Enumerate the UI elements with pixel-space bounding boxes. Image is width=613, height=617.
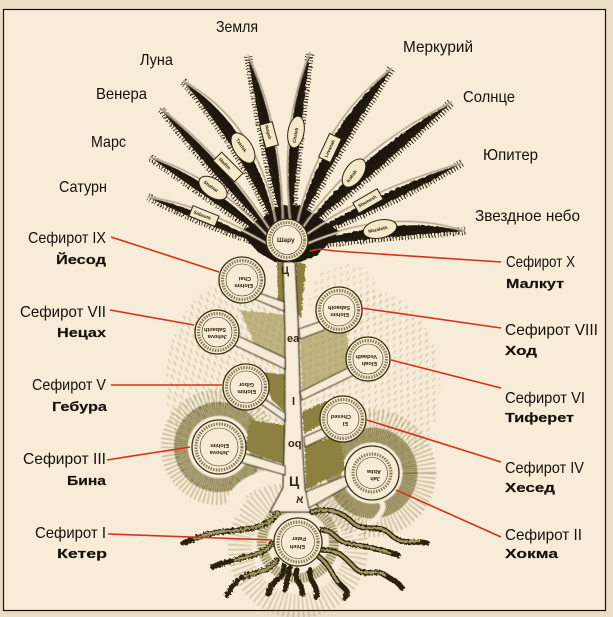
sefirot labels, left column: Бина [67, 473, 107, 488]
sefirot labels, left column: Йесод [56, 252, 107, 267]
sefirot labels, right column: Сефирот VI [505, 390, 585, 407]
engraved tree illustration [148, 52, 465, 606]
feather name tags: Madim [218, 157, 232, 171]
sefirah IX medallion [219, 257, 265, 303]
sefirah VIII medallion: Sabaoth [327, 304, 350, 310]
trunk letters: ea [287, 333, 300, 345]
sefirot labels, right column: Сефирот X [506, 254, 575, 271]
sefirot labels, left column: Гебура [52, 399, 108, 414]
planet labels: Солнце [463, 89, 515, 106]
planet labels: Сатурн [59, 179, 107, 196]
planet labels [59, 19, 580, 225]
sefirot labels, right column [505, 254, 598, 561]
sefirah II medallion: Abba [366, 468, 381, 474]
feathers dark barbs [148, 52, 465, 262]
sefirah II medallion [345, 446, 399, 500]
sefirah VII medallion: Jehova [207, 333, 227, 339]
trunk letters: Ц [281, 265, 289, 277]
pale arc around the root [232, 476, 283, 515]
sefirah III medallion: Elohim [210, 442, 229, 448]
sefirah X medallion [266, 219, 308, 261]
sefirah II medallion: Jah [370, 475, 380, 481]
trunk [270, 262, 322, 512]
sefirot labels, right column: Тиферет [505, 410, 574, 425]
halo of sefirah III [169, 397, 269, 497]
sefirot labels, right column: Ход [505, 343, 538, 358]
feather name tags [189, 115, 398, 241]
sefirot labels, right column: Хесед [505, 480, 556, 495]
branches to the sefirot [232, 292, 354, 508]
dark mass at the hub [240, 205, 340, 262]
sefirah III medallion: Jehova [209, 449, 229, 455]
sefirot labels, left column: Сефирот IX [28, 230, 106, 247]
sefirah VI medallion: Vedaath [355, 353, 377, 359]
sefirah VII medallion [195, 310, 239, 354]
trunk shading [240, 262, 352, 490]
planet labels: Звездное небо [475, 208, 580, 225]
feather name tags: Kokab [346, 169, 358, 183]
sefirah IX medallion: Chai [238, 275, 251, 281]
sefirah VII medallion: Sabaoth [203, 326, 226, 332]
planet labels: Венера [96, 86, 147, 103]
trunk letters [281, 265, 304, 506]
sefirot labels, right column: Сефирот IV [505, 460, 584, 477]
sefirah I medallion [274, 518, 322, 566]
trunk letters: l [292, 396, 295, 408]
red leader lines [107, 237, 501, 540]
sefirot labels, left column [20, 230, 108, 561]
sefirot labels, right column: Сефирот VIII [505, 322, 598, 339]
feather name tags: Shemesh [357, 194, 378, 209]
planet labels: Земля [216, 19, 258, 36]
feather stems [148, 52, 465, 244]
sefirah VI medallion [346, 337, 390, 381]
sefirah IV medallion: El [342, 420, 348, 426]
sefirot labels, left column: Сефирот VII [20, 304, 106, 321]
feather name tags: Tzedek [235, 137, 248, 154]
halo of sefirah II [317, 418, 427, 528]
sefirot labels, left column: Сефирот I [35, 525, 106, 542]
sefirah VIII medallion: Elohim [330, 311, 349, 317]
sefirah I medallion: Ehieh [289, 543, 305, 549]
sefirah V medallion: Elohim [237, 388, 256, 394]
halo of sefirah I [240, 490, 356, 606]
sefirot labels, right column: Хокма [505, 546, 559, 561]
sefirot labels, right column: Малкут [506, 276, 564, 291]
sefirot labels, left column: Сефирот V [32, 377, 106, 394]
sefirah I medallion: Pater [291, 535, 306, 541]
sefirot labels, left column: Нецах [57, 325, 107, 340]
feather name tags: Shabtai [203, 180, 219, 193]
trunk letters: Ц [289, 473, 300, 489]
sefirah V medallion [223, 364, 269, 410]
sefirah X medallion: Шару [277, 237, 295, 244]
sefirah IV medallion [320, 396, 366, 442]
trunk letters: א [296, 494, 304, 506]
sefirot labels, left column: Сефирот III [23, 451, 106, 468]
crown of ten feathers [148, 52, 465, 262]
feather name tags: Nogah [264, 125, 273, 140]
planet labels: Юпитер [483, 147, 538, 164]
roots [183, 510, 427, 598]
feather name tags: Levanah [324, 139, 336, 158]
sefirah IV medallion: Chesed [330, 413, 351, 419]
sefirah VIII medallion [316, 287, 362, 333]
feather name tags: Sabaoth [193, 210, 212, 221]
feather name tags: Mazaloth [368, 225, 388, 234]
planet labels: Луна [140, 52, 173, 69]
sefirot labels, left column: Кетер [57, 546, 107, 561]
planet labels: Меркурий [403, 39, 473, 56]
feather name tags: Chaleb [292, 127, 299, 143]
hatching around the tree [166, 264, 440, 606]
sefirah VI medallion: Eloah [361, 360, 377, 366]
halo gaps [188, 416, 250, 478]
trunk letters: oq [288, 438, 301, 450]
sefirot labels, right column: Сефирот II [505, 527, 582, 544]
planet labels: Марс [91, 134, 126, 151]
sefirah V medallion: Gibor [238, 381, 254, 387]
sefirah III medallion [192, 420, 246, 474]
sefirah IX medallion: Elohim [234, 282, 253, 288]
